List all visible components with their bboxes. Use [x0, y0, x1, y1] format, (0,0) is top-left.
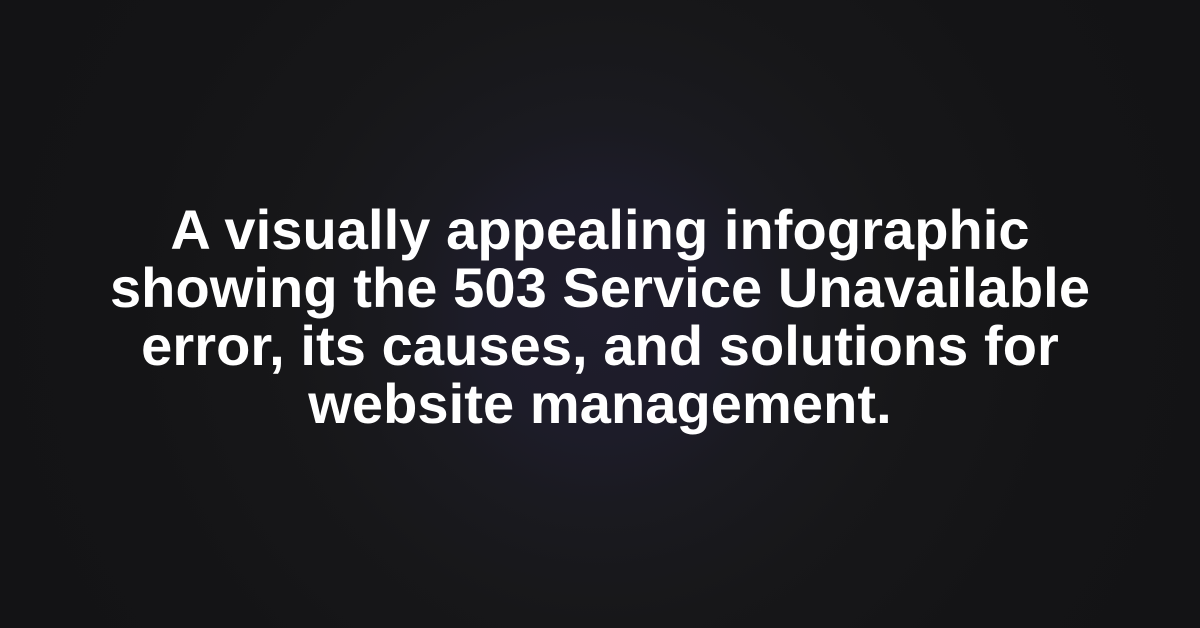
title: website management.	[308, 372, 892, 435]
title: showing the 503 Service Unavailable	[110, 256, 1090, 319]
title: A visually appealing infographic	[170, 198, 1030, 261]
title: error, its causes, and solutions for	[141, 314, 1059, 377]
title	[110, 198, 1090, 435]
